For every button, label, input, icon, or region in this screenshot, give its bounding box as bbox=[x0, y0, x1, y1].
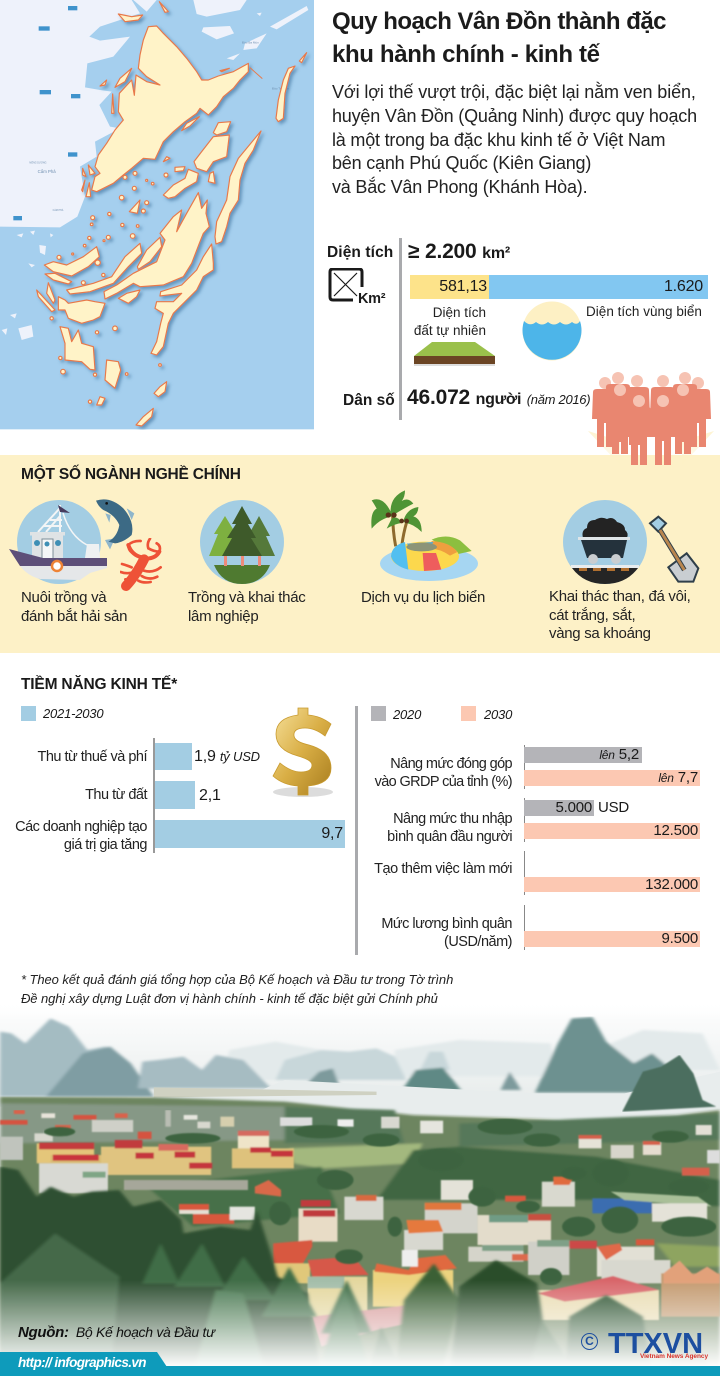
row: new jobs: Tạo thêm việc làm mới bbox=[374, 861, 512, 877]
hazy distant islands bbox=[0, 1017, 720, 1097]
top and bottom fades bbox=[0, 1000, 720, 1020]
map islands bbox=[37, 2, 307, 426]
right karst bbox=[622, 1055, 716, 1112]
panel: economic potential: Thu từ đất bbox=[85, 787, 147, 803]
logo: TTXVN bbox=[581, 1328, 708, 1360]
sea bbox=[246, 1072, 720, 1120]
land label: đất tự nhiên bbox=[414, 323, 486, 338]
icon: coal cart bbox=[563, 500, 647, 584]
title: Quy hoạch Vân Đồn thành đặc bbox=[332, 8, 666, 35]
bar: sea area: 1.620 bbox=[664, 278, 703, 295]
map text labels: CẨM PHẢ bbox=[53, 209, 64, 212]
panel: economic potential: 2021-2030 bbox=[43, 706, 103, 721]
panel: targets: 9.500 bbox=[661, 930, 698, 947]
map text labels: Đảo Trà Bản bbox=[272, 86, 289, 90]
copyright mark bbox=[581, 1333, 598, 1350]
title bbox=[332, 8, 666, 68]
industry labels: đánh bắt hải sản bbox=[21, 608, 127, 625]
legend 2020 bbox=[371, 706, 386, 721]
village tree clumps bbox=[44, 1119, 716, 1285]
row: average salary bbox=[381, 916, 512, 950]
panel: economic potential: Các doanh nghiệp tạo bbox=[15, 819, 147, 835]
panel: economic potential: 2,1 bbox=[199, 787, 221, 804]
intro text block bbox=[332, 82, 697, 197]
icon: area km2 bbox=[328, 268, 386, 306]
icon: sea circle bbox=[522, 302, 582, 360]
panel: main industries: Trồng và khai thác bbox=[188, 589, 305, 606]
panel: targets: USD bbox=[598, 799, 629, 816]
panel: main industries: lâm nghiệp bbox=[188, 608, 258, 625]
photo: Van Don landscape bbox=[0, 1016, 720, 1364]
footnote bbox=[21, 972, 453, 1006]
buildings bbox=[0, 1110, 720, 1347]
panel: map of Van Don bbox=[0, 0, 314, 430]
icon: palm and float bbox=[371, 490, 478, 581]
bar: land area bbox=[410, 275, 489, 299]
forest foreground bbox=[0, 1167, 720, 1376]
icon: land block bbox=[414, 342, 495, 366]
row: income per capita: Nâng mức thu nhập bbox=[393, 811, 512, 827]
row: GRDP contribution bbox=[374, 756, 512, 790]
copyright mark: C bbox=[585, 1334, 594, 1348]
row: GRDP contribution: Nâng mức đóng góp bbox=[390, 756, 512, 772]
source: Nguồn: Bộ Kế hoạch và Đầu tư bbox=[18, 1324, 215, 1341]
panel: main industries: vàng sa khoáng bbox=[549, 625, 651, 642]
title: khu hành chính - kinh tế bbox=[332, 41, 600, 68]
panel: targets: 2030 bbox=[484, 707, 512, 722]
map text labels: MÔNG DƯƠNG bbox=[29, 161, 47, 164]
divider bbox=[399, 238, 402, 420]
map text labels: Đảo Ba Mùn bbox=[242, 41, 259, 45]
icon: fishing boat bbox=[9, 500, 107, 584]
panel: area bbox=[327, 240, 708, 338]
legend 2021-2030 bbox=[21, 706, 36, 721]
panel: targets bbox=[371, 706, 700, 950]
bar: land revenue bbox=[155, 781, 195, 809]
industry labels: Nuôi trồng và bbox=[21, 589, 106, 606]
panel: targets: lên 7,7 bbox=[658, 769, 698, 786]
footer url tab bbox=[0, 1352, 166, 1366]
panel: economic potential bbox=[15, 675, 345, 853]
divider bbox=[355, 706, 358, 955]
panel: main industries: cát trắng, sắt, bbox=[549, 606, 635, 624]
icon: people group bbox=[588, 372, 714, 465]
map pier stroke bbox=[250, 68, 262, 79]
population label: Dân số bbox=[343, 392, 395, 409]
footer band bbox=[0, 1366, 720, 1376]
industry labels bbox=[21, 589, 127, 625]
area total: ≥ 2.200 km² bbox=[408, 240, 510, 263]
axes bbox=[524, 745, 525, 789]
wordmark: TTXVN bbox=[608, 1328, 703, 1360]
intro text block: huyện Vân Đồn (Quảng Ninh) được quy hoạch bbox=[332, 106, 697, 126]
sea label: Diện tích vùng biển bbox=[586, 304, 702, 319]
bar: sea area bbox=[489, 275, 708, 299]
row: average salary: (USD/năm) bbox=[444, 934, 512, 950]
panel: targets: 5.000 bbox=[555, 799, 592, 816]
intro text block: là một trong ba đặc khu kinh tế ở Việt Nam bbox=[332, 130, 665, 150]
footer url: http:// infographics.vn bbox=[18, 1355, 146, 1370]
village and fields bbox=[0, 1097, 720, 1376]
panel: population bbox=[343, 386, 590, 409]
panel: targets: 132.000 bbox=[645, 876, 698, 893]
panel: main industries bbox=[0, 455, 720, 653]
land label: Diện tích bbox=[433, 305, 486, 320]
panel: economic potential: Thu từ thuế và phí bbox=[37, 749, 147, 765]
panel: targets: lên 5,2 bbox=[599, 746, 639, 763]
intro text block: bên cạnh Phú Quốc (Kiên Giang) bbox=[332, 153, 591, 173]
panel: main industries: Dịch vụ du lịch biển bbox=[361, 589, 485, 606]
row: income per capita bbox=[387, 811, 512, 845]
industries heading: MỘT SỐ NGÀNH NGHỀ CHÍNH bbox=[21, 466, 241, 483]
potential heading: TIỀM NĂNG KINH TẾ* bbox=[21, 676, 177, 693]
footnote: * Theo kết quả đánh giá tổng hợp của Bộ Kế hoạch và Đầu tư trong Tờ trình bbox=[21, 972, 453, 987]
intro text block: và Bắc Vân Phong (Khánh Hòa). bbox=[332, 177, 587, 197]
tagline: Vietnam News Agency bbox=[640, 1353, 708, 1360]
row: average salary: Mức lương bình quân bbox=[381, 916, 512, 932]
icon: dollar bbox=[272, 708, 333, 797]
icon: lobster bbox=[120, 538, 162, 591]
axis bbox=[153, 738, 154, 853]
bar: tax and fees bbox=[155, 743, 192, 770]
panel: targets: 2020 bbox=[393, 707, 421, 722]
land label bbox=[414, 305, 486, 338]
footnote: Đề nghị xây dựng Luật đơn vị hành chính - kinh tế đặc biệt gửi Chính phủ bbox=[21, 991, 438, 1006]
map road tags bbox=[13, 6, 80, 220]
bar: businesses: 9,7 bbox=[321, 825, 343, 842]
area label: Diện tích bbox=[327, 244, 393, 261]
panel: economic potential: 1,9 tỷ USD bbox=[194, 748, 260, 765]
bar: businesses bbox=[155, 820, 345, 848]
map text labels: Cẩm Phả bbox=[38, 169, 56, 174]
row: GRDP contribution: vào GRDP của tỉnh (%) bbox=[375, 774, 512, 790]
icon: fish bbox=[96, 499, 134, 550]
icon: shovel bbox=[648, 515, 700, 583]
icon: forest bbox=[200, 500, 284, 584]
map text labels bbox=[29, 41, 289, 212]
intro text block: Với lợi thế vượt trội, đặc biệt lại nằm ven biển, bbox=[332, 82, 696, 102]
panel: economic potential: giá trị gia tăng bbox=[64, 837, 147, 853]
panel: main industries: Khai thác than, đá vôi, bbox=[549, 588, 691, 605]
bar: land area: 581,13 bbox=[439, 278, 487, 295]
legend 2030 bbox=[461, 706, 476, 721]
map coastal specks bbox=[2, 231, 53, 340]
row: income per capita: bình quân đầu người bbox=[387, 829, 512, 845]
panel: targets: 12.500 bbox=[653, 822, 698, 839]
population number: 46.072 người (năm 2016) bbox=[407, 386, 590, 409]
